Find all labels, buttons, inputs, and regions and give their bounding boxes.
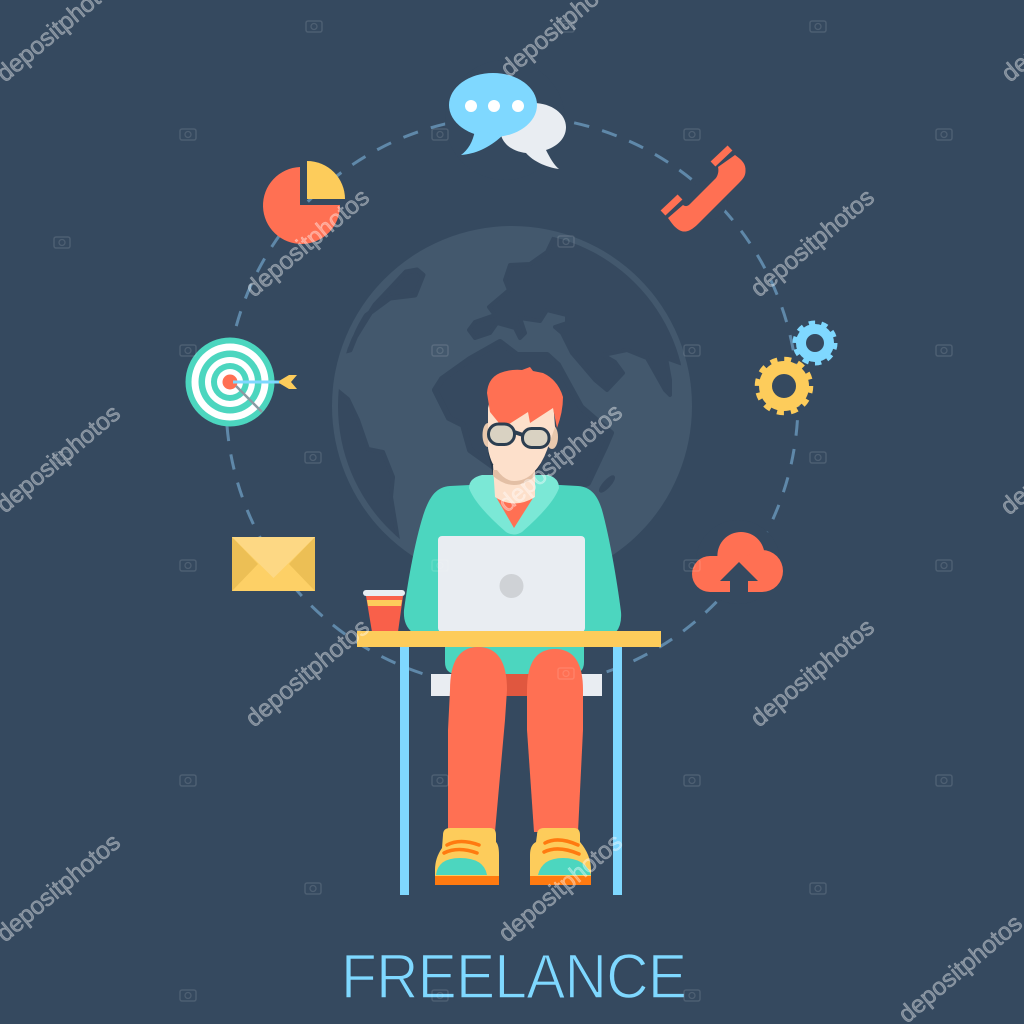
right shoe xyxy=(530,828,591,885)
face xyxy=(488,400,555,481)
icon: cloud upload xyxy=(692,532,783,593)
ears xyxy=(482,423,558,449)
icon: blue gear xyxy=(795,323,835,363)
watermarks: depositphotos xyxy=(494,399,628,518)
watermarks: depositphotos xyxy=(241,614,375,733)
person xyxy=(357,367,661,895)
icon: pie chart xyxy=(263,161,345,244)
hair xyxy=(487,367,563,428)
globe xyxy=(332,226,692,556)
chair xyxy=(431,674,602,696)
watermarks: depositphotos xyxy=(746,614,880,733)
laptop xyxy=(438,536,585,632)
left leg xyxy=(448,647,507,832)
hoodie xyxy=(404,485,621,632)
icon: yellow gear xyxy=(758,360,810,412)
icon: telephone xyxy=(663,148,746,232)
left shoe xyxy=(435,828,499,885)
icon: speech bubbles xyxy=(449,73,566,169)
hood collar xyxy=(469,475,559,534)
icon: envelope xyxy=(232,537,315,591)
watermarks: depositphotos xyxy=(746,184,880,303)
title: FREELANCE xyxy=(341,941,687,1011)
desk xyxy=(357,631,661,895)
right leg xyxy=(527,649,583,832)
neck xyxy=(488,450,547,504)
watermarks: depositphotos xyxy=(494,829,628,948)
glasses xyxy=(488,424,549,448)
icon: target with arrow xyxy=(186,338,297,426)
dashed orbit ring xyxy=(226,60,798,688)
coffee cup xyxy=(363,590,405,632)
red shirt xyxy=(496,488,533,528)
torso lower xyxy=(445,645,584,674)
watermarks: depositphotos xyxy=(241,184,375,303)
